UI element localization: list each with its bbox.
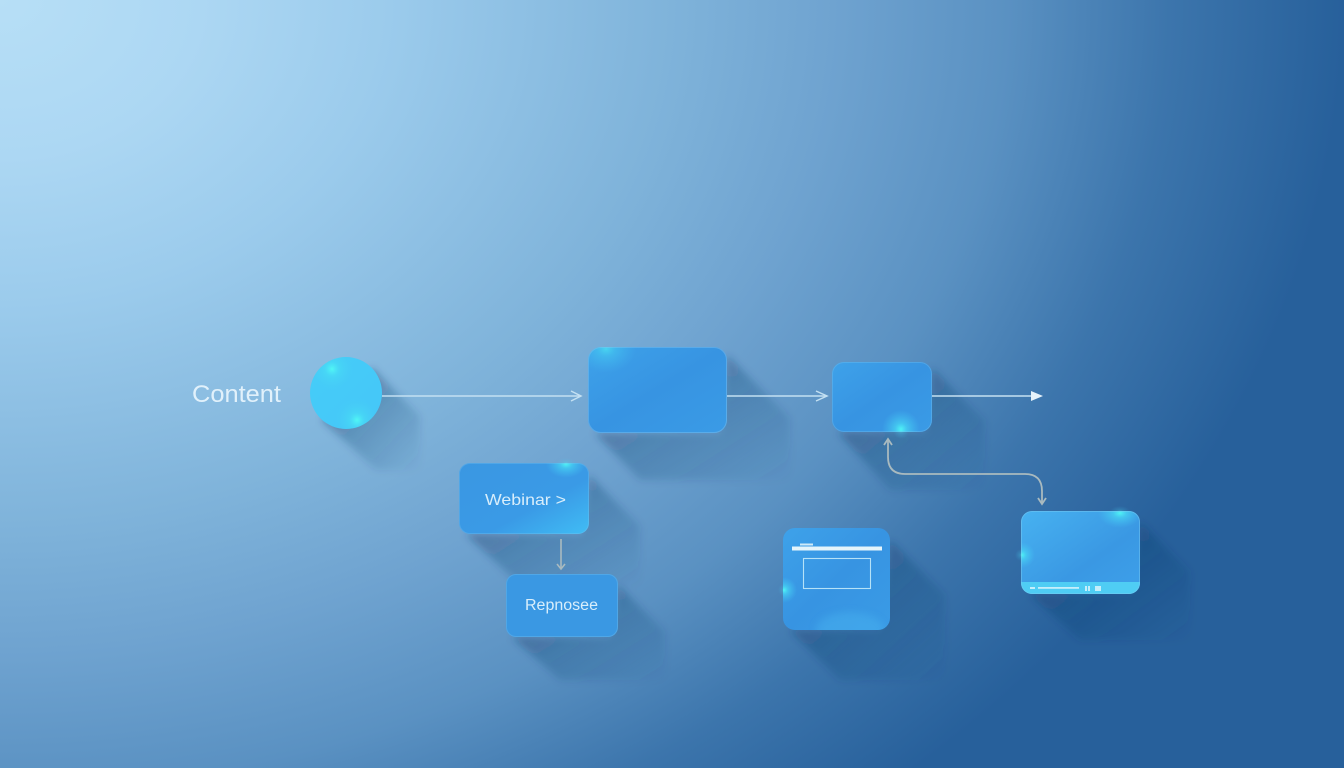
glow spot [778,584,790,596]
arrow: circle to box [382,391,581,401]
card: video player [1016,508,1140,594]
player controls [1030,586,1101,591]
box: upper right [832,362,932,436]
arrow: box to small box [727,391,827,401]
label: Content: Content [192,381,281,408]
node: circle [310,357,382,429]
browser top bar [792,546,882,550]
box: upper middle [588,347,727,433]
arrow: Webinar to Response [557,539,565,569]
arrow: feedback connector [884,439,1046,504]
box: Response [506,574,618,637]
arrow: output [932,391,1043,401]
player control bar [1021,582,1140,594]
card: browser window [780,528,890,630]
browser content frame [804,558,870,588]
long shadows [322,355,1190,680]
label: Repnosee: Repnosee [525,597,598,614]
label: Webinar: Webinar > [485,492,566,509]
box: Webinar [459,461,589,534]
